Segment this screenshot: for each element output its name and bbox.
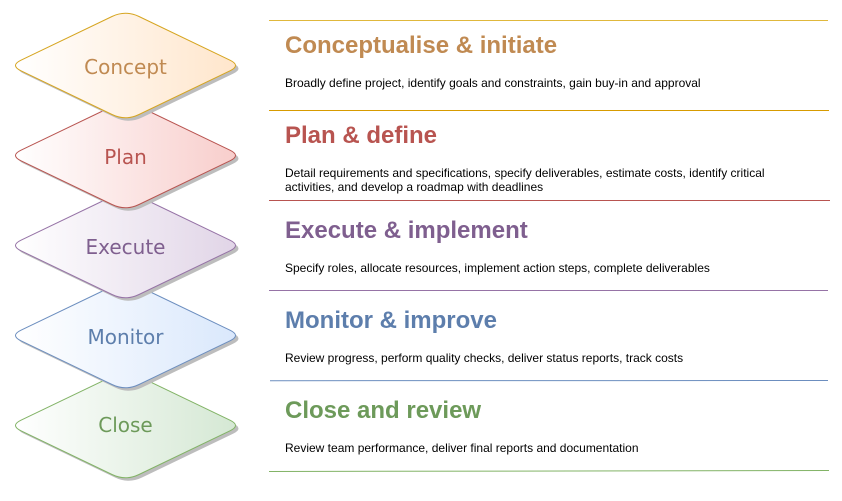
text block: Conceptualise & initiate: Broadly define project, identify goals and constraints, gain buy-in and approval [285,76,701,90]
diamond: Execute: Execute [86,235,165,259]
text block: Execute & implement: Execute & implement [285,217,528,244]
text block: Plan & define: Detail requirements and specifications, specify deliverables, estimate costs, identify critical [285,166,765,180]
text block: Close and review [285,397,639,455]
text block: Plan & define [285,122,765,194]
diamond: Execute [16,193,238,301]
diamond: Concept: Concept [84,55,167,79]
text block: Monitor & improve [285,307,683,365]
text block: Close and review: Close and review [285,397,481,424]
text block: Plan & define: Plan & define [285,122,437,149]
diamond: Close [16,373,238,481]
text block: Conceptualise & initiate: Conceptualise & initiate [285,32,557,59]
text block: Execute & implement [285,217,710,275]
text block: Plan & define: activities, and develop a roadmap with deadlines [285,180,543,194]
text block: Conceptualise & initiate [285,32,701,90]
diamond: Plan: Plan [104,145,147,169]
text block: Close and review: Review team performance, deliver final reports and documentation [285,441,639,455]
text block: Monitor & improve: Review progress, perform quality checks, deliver status reports, track costs [285,351,683,365]
text block: Monitor & improve: Monitor & improve [285,307,497,334]
diamond: Monitor: Monitor [87,325,164,349]
text block: Execute & implement: Specify roles, allocate resources, implement action steps, complete deliverables [285,261,710,275]
diamond: Plan [16,103,238,211]
diamond: Monitor [16,283,238,391]
diamond: Concept [16,13,238,121]
diamond: Close: Close [98,413,153,437]
